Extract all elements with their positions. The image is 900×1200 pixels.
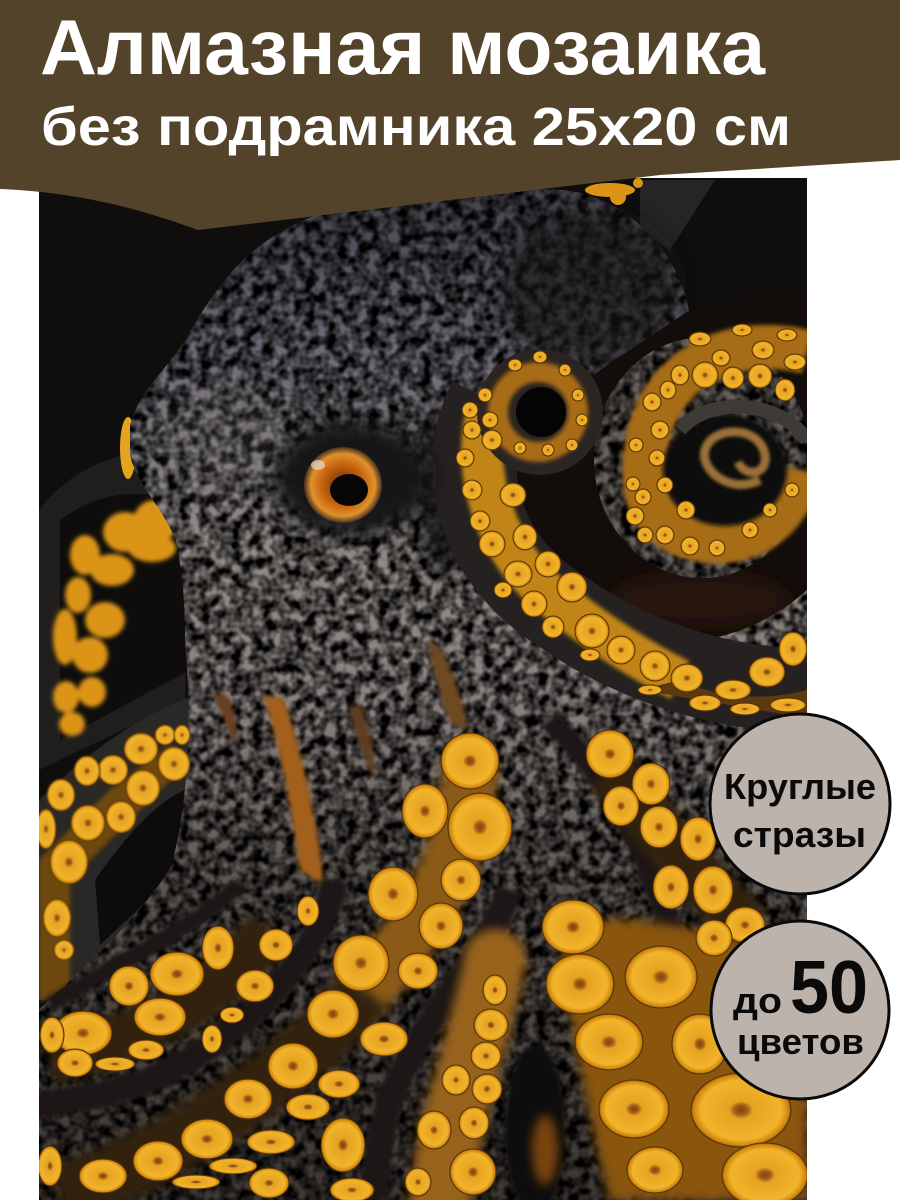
octopus picture bbox=[36, 178, 810, 1200]
subtitle: без подрамника 25х20 см bbox=[41, 97, 791, 157]
title: Алмазная мозаика bbox=[40, 3, 766, 91]
dark backdrop bbox=[39, 178, 807, 1010]
main tentacle gold strip upper bbox=[365, 775, 470, 990]
tentacle gold under right arm bbox=[658, 682, 807, 714]
left gold strip bbox=[39, 745, 190, 1000]
suckers: curl 2 bbox=[626, 324, 806, 556]
badge: up to 50 colours: до bbox=[733, 980, 782, 1021]
curl hole bbox=[516, 387, 566, 437]
upper gold arm bbox=[644, 347, 807, 541]
dark tentacle bands bbox=[39, 720, 670, 1200]
siphon folds and orange strips bbox=[212, 640, 468, 885]
right tentacle strip bbox=[610, 770, 750, 930]
suckers: right tentacle bbox=[542, 730, 808, 1200]
suckers: main tentacle bbox=[38, 733, 512, 1200]
left middle dark underside bbox=[95, 790, 185, 945]
curl 2 dark spiral body bbox=[594, 338, 810, 578]
gold strip bbox=[482, 410, 680, 680]
badge: round rhinestones: Круглые bbox=[724, 766, 876, 807]
blurred far left suckers bbox=[53, 500, 177, 736]
badge: round rhinestones bbox=[710, 714, 890, 894]
left middle tentacle bbox=[39, 695, 195, 1000]
dark inner eye of spiral bbox=[663, 414, 787, 526]
inner grey rim bbox=[680, 407, 807, 440]
main tentacle dark strip lower bbox=[60, 990, 365, 1195]
black opening with glow bbox=[505, 1045, 565, 1200]
iris bbox=[304, 447, 382, 523]
rear tentacle top right bbox=[640, 180, 715, 250]
badge: up to 50 colours: цветов bbox=[737, 1021, 864, 1062]
curl 1 arm bbox=[475, 349, 807, 690]
badge: round rhinestones: стразы bbox=[733, 814, 866, 855]
suckers: lower left tentacle bbox=[40, 896, 319, 1077]
socket bbox=[274, 420, 430, 536]
gold ring bbox=[498, 372, 578, 452]
main body and head bbox=[39, 189, 807, 1200]
eye bbox=[274, 420, 430, 536]
ring of curl bbox=[477, 349, 603, 475]
top banner bbox=[0, 0, 900, 230]
bottom right gold mass bbox=[560, 920, 807, 1200]
warm glow below curl bbox=[610, 575, 790, 625]
badge: up to 50 colours bbox=[711, 921, 889, 1099]
outer spiral bbox=[594, 338, 810, 578]
head shading bbox=[165, 210, 680, 575]
suckers: upper left tentacle bbox=[36, 725, 190, 960]
lower sweep band bbox=[718, 590, 807, 646]
rear gold suckers near top bbox=[585, 178, 643, 205]
badge: up to 50 colours: 50 bbox=[790, 945, 868, 1029]
left eye sliver bbox=[120, 417, 136, 479]
center tentacle gold strip bbox=[440, 960, 495, 1200]
far left dark tentacle arc bbox=[39, 450, 190, 770]
suckers: curl 1 arm bbox=[456, 351, 807, 715]
eye highlight bbox=[311, 460, 325, 470]
tan spiral tip bbox=[704, 432, 765, 485]
far left inner dark bbox=[60, 494, 190, 740]
dark gap behind curls bbox=[516, 310, 690, 629]
suckers: center tentacle bbox=[405, 975, 508, 1196]
dark arm bbox=[475, 400, 807, 690]
lower left tentacle strip bbox=[50, 930, 270, 1060]
pupil bbox=[330, 474, 368, 506]
